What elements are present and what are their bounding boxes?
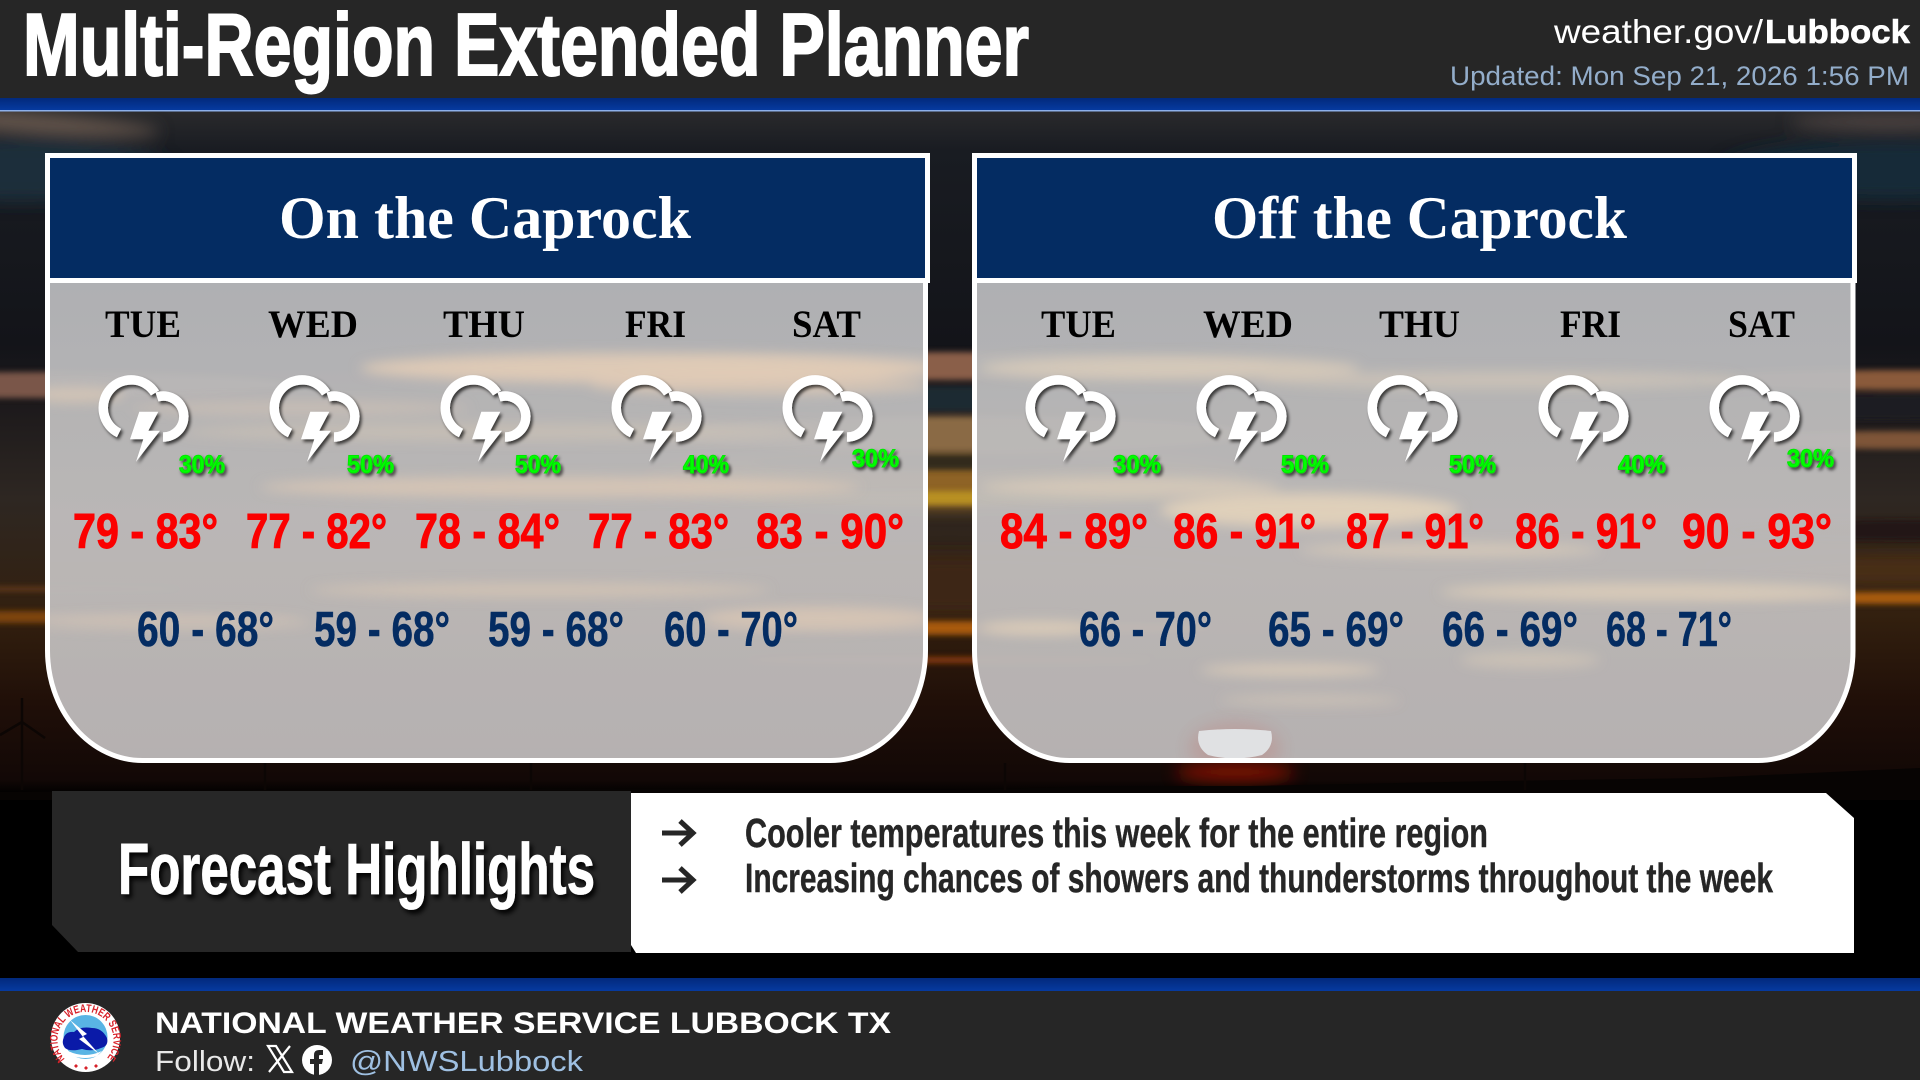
day labels: SAT bbox=[1728, 303, 1795, 346]
high temperatures: 84 - 89° bbox=[1000, 505, 1148, 559]
precipitation chances: 30% bbox=[179, 451, 225, 479]
panel heading: On the Caprock bbox=[279, 185, 692, 251]
low temperatures: 65 - 69° bbox=[1268, 603, 1404, 657]
icons: thunderstorm bbox=[1030, 380, 1795, 462]
low temperatures bbox=[137, 603, 798, 657]
updated timestamp: Updated: Mon Sep 21, 2026 1:56 PM bbox=[1450, 61, 1909, 91]
low temperatures bbox=[1079, 603, 1732, 657]
day labels: TUE bbox=[105, 303, 181, 346]
low temperatures: 66 - 69° bbox=[1442, 603, 1578, 657]
high temperatures: 86 - 91° bbox=[1515, 505, 1657, 559]
precipitation chances: 30% bbox=[1787, 445, 1834, 473]
precipitation chances: 40% bbox=[1618, 451, 1666, 479]
precipitation chances: 30% bbox=[852, 445, 899, 473]
icons: thunderstorm bbox=[103, 380, 868, 462]
highlights list bbox=[631, 793, 1854, 953]
footer bar bbox=[0, 978, 1920, 1080]
high temperatures: 77 - 83° bbox=[588, 505, 729, 559]
follow label: Follow: bbox=[155, 1046, 255, 1078]
sun bbox=[1189, 720, 1281, 758]
precipitation chances: 30% bbox=[1113, 451, 1161, 479]
precipitation chances bbox=[1113, 445, 1834, 479]
organization name: NATIONAL WEATHER SERVICE LUBBOCK TX bbox=[155, 1007, 891, 1040]
highlight line 1: Cooler temperatures this week for the entire region bbox=[745, 810, 1488, 856]
low temperatures: 59 - 68° bbox=[314, 603, 450, 657]
panel heading bbox=[974, 156, 1854, 280]
header bar bbox=[0, 0, 1920, 112]
day labels: FRI bbox=[1560, 303, 1621, 346]
day labels: THU bbox=[443, 303, 525, 346]
precipitation chances: 40% bbox=[683, 451, 729, 479]
social handle: @NWSLubbock bbox=[350, 1046, 584, 1078]
arrow bullet 2 bbox=[662, 868, 693, 892]
website link bbox=[1553, 13, 1911, 50]
day labels: TUE bbox=[1041, 303, 1116, 346]
high temperatures bbox=[73, 505, 904, 559]
high temperatures: 83 - 90° bbox=[756, 505, 904, 559]
icon: X bbox=[268, 1046, 292, 1072]
website link: Lubbock bbox=[1765, 13, 1911, 50]
panel: On the Caprock bbox=[25, 156, 940, 760]
day labels: FRI bbox=[625, 303, 686, 346]
arrow bullet 1 bbox=[662, 821, 693, 845]
high temperatures: 86 - 91° bbox=[1173, 505, 1316, 559]
low temperatures: 60 - 70° bbox=[664, 603, 798, 657]
low temperatures: 59 - 68° bbox=[488, 603, 624, 657]
highlights label: Forecast Highlights bbox=[118, 830, 595, 910]
precipitation chances: 50% bbox=[515, 451, 561, 479]
precipitation chances bbox=[179, 445, 899, 479]
day labels bbox=[105, 303, 861, 346]
high temperatures: 79 - 83° bbox=[73, 505, 218, 559]
day labels: WED bbox=[1203, 303, 1293, 346]
low temperatures: 68 - 71° bbox=[1606, 603, 1732, 657]
panel heading bbox=[48, 156, 928, 280]
high temperatures bbox=[1000, 505, 1832, 559]
panel: Off the Caprock bbox=[974, 156, 1860, 774]
low temperatures: 60 - 68° bbox=[137, 603, 274, 657]
icon: Facebook bbox=[302, 1045, 332, 1075]
high temperatures: 90 - 93° bbox=[1682, 505, 1832, 559]
precipitation chances: 50% bbox=[1281, 451, 1329, 479]
high temperatures: 77 - 82° bbox=[246, 505, 387, 559]
day labels: THU bbox=[1379, 303, 1460, 346]
icon: NWS logo: NATIONAL WEATHER SERVICE bbox=[50, 1004, 122, 1064]
website link: weather.gov/ bbox=[1553, 13, 1764, 50]
precipitation chances: 50% bbox=[347, 451, 394, 479]
day labels bbox=[1041, 303, 1795, 346]
high temperatures: 87 - 91° bbox=[1346, 505, 1484, 559]
panel: forecast highlights bbox=[52, 791, 1854, 953]
day labels: SAT bbox=[792, 303, 861, 346]
precipitation chances: 50% bbox=[1449, 451, 1496, 479]
highlights label bbox=[52, 791, 631, 952]
panel heading: Off the Caprock bbox=[1212, 185, 1628, 251]
high temperatures: 78 - 84° bbox=[415, 505, 560, 559]
day labels: WED bbox=[268, 303, 358, 346]
low temperatures: 66 - 70° bbox=[1079, 603, 1212, 657]
